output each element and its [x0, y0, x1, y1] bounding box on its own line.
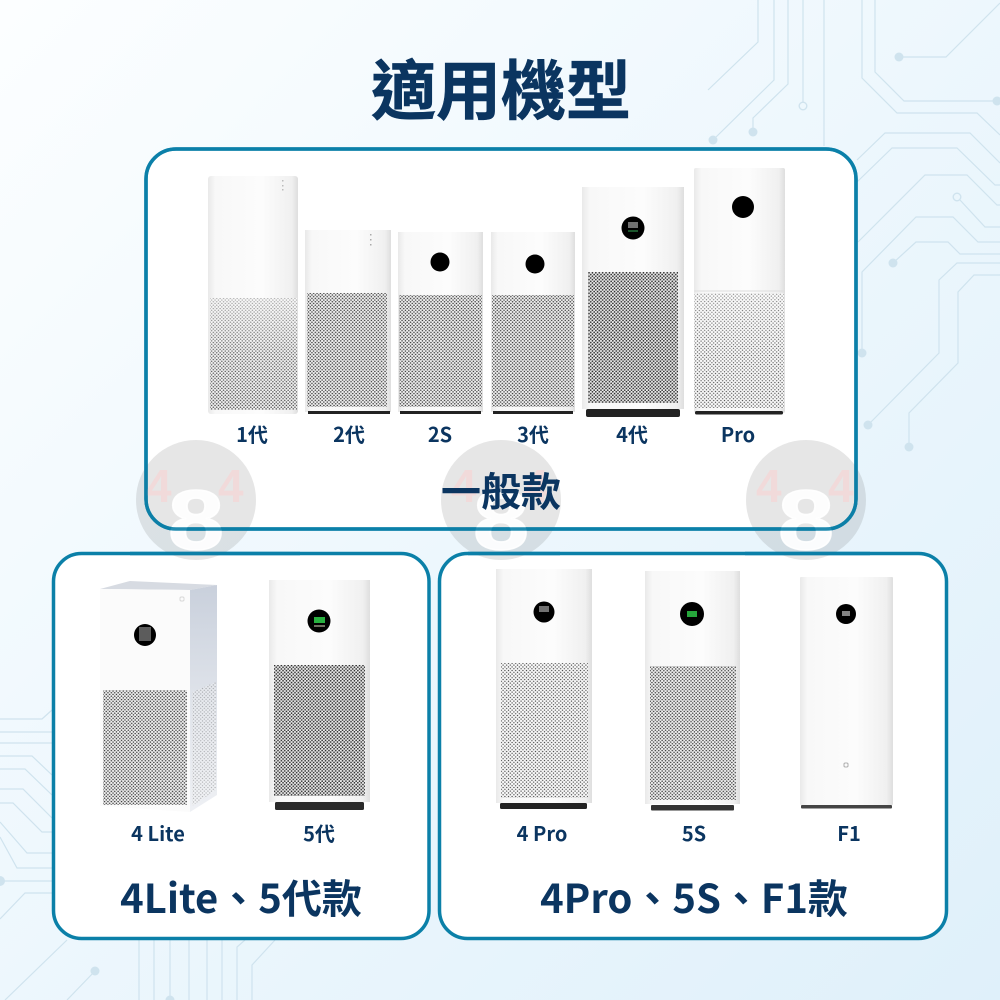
watermark: left: 8 [168, 473, 224, 567]
label: F1: F1 [837, 818, 861, 847]
heading: 4Lite and 5: 4Lite、5代款 [120, 867, 362, 925]
panel: 4Lite and 5 [54, 554, 429, 938]
watermark: left: 4 [146, 460, 172, 512]
purifier: 5S [645, 571, 740, 810]
labels: general models: 4代 [616, 419, 648, 448]
watermark: center: 4 [523, 460, 549, 512]
watermark: right: 4 [756, 460, 782, 512]
labels: general models [236, 419, 755, 448]
purifier: 1代 [208, 176, 298, 414]
circuit pattern: bottom left [0, 710, 275, 1000]
purifier: 2代 [305, 230, 391, 414]
purifier: Pro [694, 168, 785, 414]
panel: general models [146, 149, 856, 529]
heading: general models: 一般款 [441, 460, 561, 518]
watermark: right: 4 [828, 460, 854, 512]
watermark: right [746, 440, 866, 567]
labels: general models: 2代 [333, 419, 365, 448]
label: 4 Pro: 4 Pro [517, 818, 567, 847]
label: 5代: 5代 [303, 818, 335, 847]
watermark: center: 4 [451, 460, 477, 512]
title: 適用機型 [371, 39, 631, 133]
labels: general models: Pro [721, 419, 755, 448]
watermark: left: 4 [218, 460, 244, 512]
label: 4 Lite: 4 Lite [131, 818, 185, 847]
heading: 4Pro, 5S, F1: 4Pro、5S、F1款 [540, 867, 848, 925]
watermark: center: 8 [473, 473, 529, 567]
panel border overlay [130, 149, 870, 554]
circuit pattern: top right [708, 0, 1000, 452]
label: 5S: 5S [682, 818, 706, 847]
purifier: 2S [398, 232, 483, 414]
purifier: F1 [800, 577, 893, 808]
panel: 4Pro, 5S, F1 [440, 554, 946, 938]
labels: general models: 1代 [236, 419, 268, 448]
labels: general models: 3代 [517, 419, 549, 448]
watermark: center [441, 440, 561, 567]
purifier: 4代 [582, 187, 684, 417]
purifier: 4 Lite [100, 581, 217, 812]
watermark: right: 8 [778, 473, 834, 567]
purifier: 4 Pro [496, 569, 592, 809]
purifier: 3代 [491, 232, 575, 414]
purifier: 5代 [269, 580, 370, 810]
labels: general models: 2S [428, 419, 452, 448]
watermark: left [136, 440, 256, 567]
